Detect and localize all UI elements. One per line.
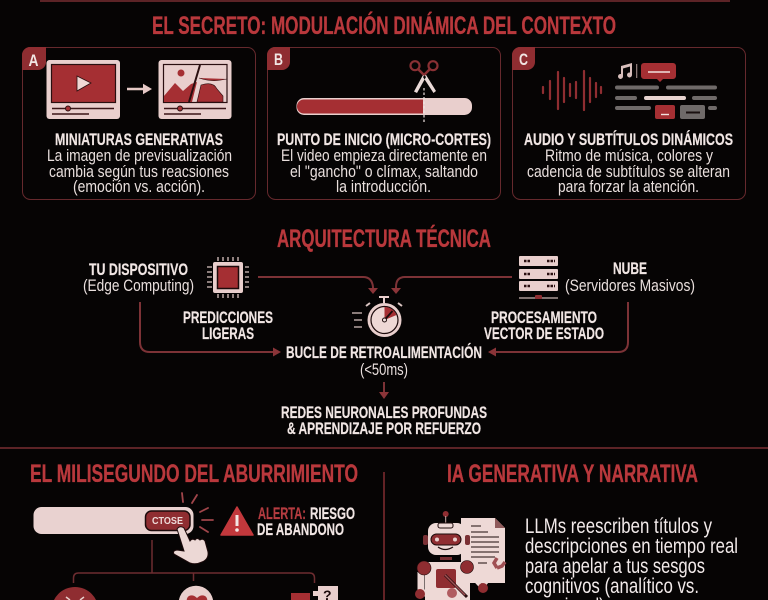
label: redes neuronales: & APRENDIZAJE POR REFUERZO: [287, 420, 481, 438]
panel: ia generativa: [415, 511, 738, 600]
arrow: device loop: [140, 302, 281, 356]
subtitle lines: [617, 88, 715, 119]
icon: chip: [207, 257, 249, 298]
badge A: [22, 47, 46, 70]
panel: miniaturas generativas: [22, 47, 256, 200]
icon: music note: [618, 63, 632, 79]
icon: generated thumbnail: [158, 60, 232, 119]
heading and text B: el "gancho" o clímax, saltando: [290, 163, 478, 181]
heading and text B: [277, 131, 491, 196]
icon: heart: [179, 586, 213, 600]
heading and text A: MINIATURAS GENERATIVAS: [55, 131, 223, 149]
icon: scissors: [410, 61, 438, 124]
heading and text A: (emoción vs. acción).: [73, 178, 205, 196]
badge C: [512, 47, 535, 70]
arrow: server to stopwatch: [391, 277, 512, 294]
icon: server: [519, 256, 558, 299]
heading: milisegundo: EL MILISEGUNDO DEL ABURRIMIENTO: [30, 460, 358, 488]
label: redes neuronales: REDES NEURONALES PROFUNDAS: [281, 404, 487, 422]
badge C: C: [519, 50, 528, 69]
label: bucle: BUCLE DE RETROALIMENTACIÓN: [286, 343, 482, 362]
icon: robot: [415, 511, 505, 600]
icon: waveform: [543, 71, 601, 110]
body text: cognitivos (analítico vs.: [525, 574, 699, 598]
close bar: CTOSE: [152, 515, 183, 527]
arrow: chip to stopwatch: [258, 277, 378, 294]
badge B: [267, 47, 290, 70]
label: predicciones ligeras: PREDICCIONES: [183, 309, 273, 327]
heading and text A: cambia según tus reacsiones: [49, 163, 229, 181]
alert text: RIESGO: [310, 505, 355, 523]
label: bucle: [286, 343, 482, 379]
heading and text A: [47, 131, 232, 196]
label: redes neuronales: [281, 404, 487, 438]
heading and text C: Ritmo de música, colores y: [545, 147, 714, 165]
heading: arquitectura tecnica: ARQUITECTURA TÉCNICA: [277, 224, 491, 253]
heading and text C: para forzar la atención.: [558, 178, 699, 196]
icon: warning: [221, 507, 253, 535]
label: tu dispositivo: (Edge Computing): [83, 277, 194, 295]
label: tu dispositivo: [83, 261, 194, 295]
arrow: down: [379, 382, 389, 399]
heading and text B: la introducción.: [336, 178, 431, 196]
icon: click rays: [182, 493, 213, 532]
arrow: cloud loop: [488, 302, 628, 356]
icon: subtitle bubble: [636, 63, 676, 82]
body text: LLMs reescriben títulos y: [525, 514, 712, 538]
icon: red face: [52, 587, 98, 600]
label: bucle: (<50ms): [360, 361, 408, 379]
panel: aburrimiento: [34, 493, 355, 600]
panel: punto de inicio: [267, 47, 500, 200]
tree connector: [74, 540, 314, 583]
badge A: A: [28, 51, 38, 70]
panel: audio y subtitulos: [512, 47, 746, 200]
body text: para apelar a tus sesgos: [525, 554, 705, 578]
alert text: DE ABANDONO: [257, 521, 344, 539]
label: nube: NUBE: [613, 260, 647, 278]
label: nube: (Servidores Masivos): [565, 277, 695, 295]
close bar: [34, 507, 194, 534]
icon: video thumbnail: [46, 60, 120, 119]
arrow: thumbnail change: [127, 84, 152, 94]
label: predicciones ligeras: [183, 309, 273, 343]
body text: [525, 514, 738, 600]
icon: document: [461, 518, 505, 583]
diagram: arquitectura: [83, 256, 695, 438]
alert text: ALERTA:: [258, 505, 306, 523]
label: nube: [565, 260, 695, 295]
heading and text C: [524, 130, 733, 196]
label: procesamiento: [484, 309, 604, 343]
label: tu dispositivo: TU DISPOSITIVO: [89, 261, 188, 279]
icon: puzzle: [291, 586, 338, 600]
progress bar: [296, 98, 472, 115]
label: procesamiento: VECTOR DE ESTADO: [484, 325, 604, 343]
heading and text C: cadencia de subtítulos se alteran: [527, 163, 730, 181]
heading and text A: La imagen de previsualización: [47, 147, 232, 165]
heading and text B: El video empieza directamente en: [281, 147, 487, 165]
label: procesamiento: PROCESAMIENTO: [491, 309, 597, 327]
icon: stopwatch: [352, 296, 402, 337]
icon: hand: [173, 527, 208, 564]
alert text: [257, 505, 355, 539]
badge B: B: [274, 50, 283, 69]
heading and text B: PUNTO DE INICIO (MICRO-CORTES): [277, 131, 491, 149]
label: predicciones ligeras: LIGERAS: [202, 325, 254, 343]
